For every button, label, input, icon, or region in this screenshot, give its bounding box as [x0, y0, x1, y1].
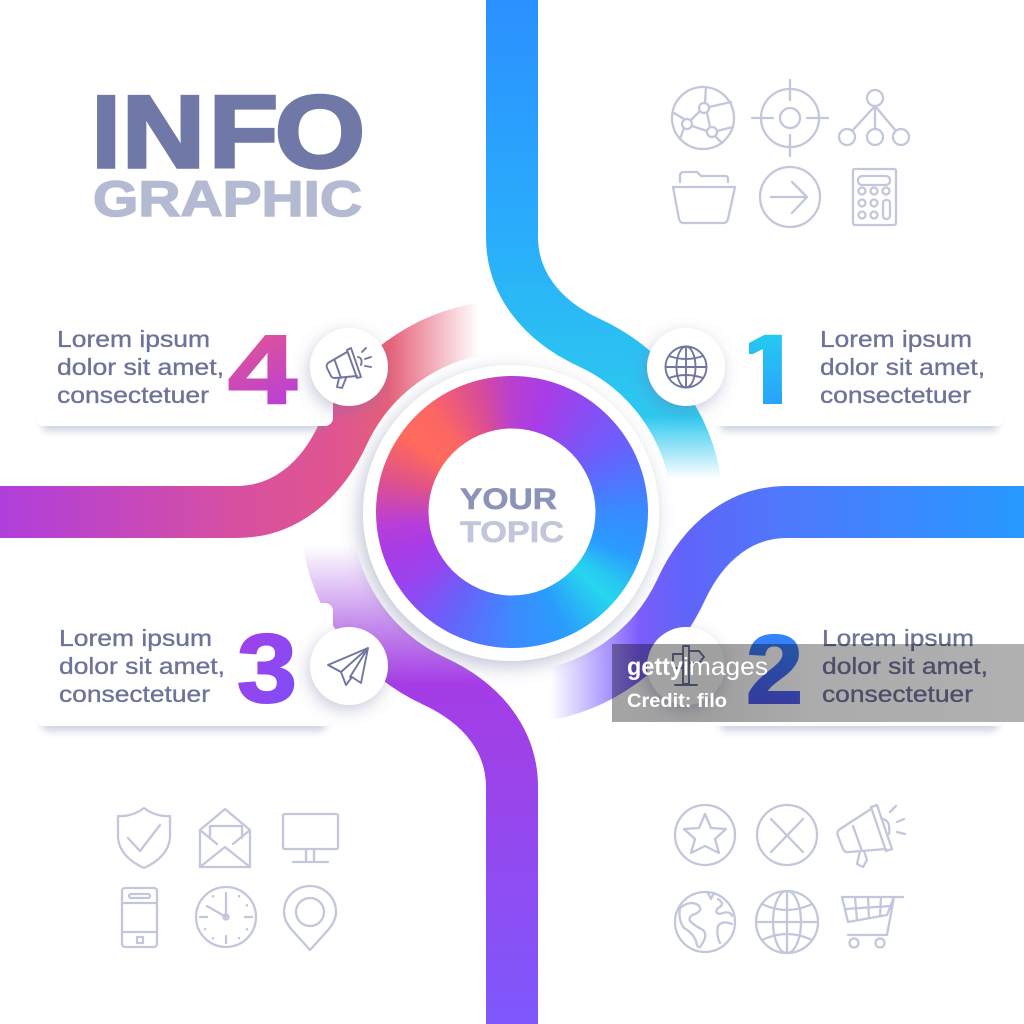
icon node 4: megaphone: [310, 328, 388, 406]
icon: map pin: [284, 886, 336, 950]
band 4: magenta ribbon from left: [0, 328, 486, 512]
band 3: purple ribbon from bottom: [328, 538, 512, 1024]
title: [92, 75, 365, 227]
card 1: [712, 303, 1004, 431]
icon: smartphone: [122, 888, 157, 947]
watermark: Credit: filo: [627, 691, 727, 712]
title: O: [275, 75, 365, 189]
text block 2: [822, 625, 988, 707]
icon: monitor: [283, 814, 338, 862]
icon: network sphere: [672, 87, 734, 149]
icon node 2: signpost: [647, 627, 725, 705]
icon: cart: [842, 897, 903, 948]
number 4: 4: [228, 315, 297, 424]
number 1: 1: [736, 315, 803, 424]
icon: clock: [196, 887, 256, 947]
icon: envelope: [200, 809, 250, 867]
text block 3: dolor sit amet,: [59, 653, 225, 679]
topic label: [460, 483, 564, 549]
centre topic ring: [363, 365, 659, 661]
icon: target: [752, 80, 828, 156]
icon node 1: globe: [647, 328, 725, 406]
band 1: blue ribbon from top: [512, 0, 696, 486]
card 3: [36, 603, 333, 731]
text block 2: consectetuer: [822, 681, 973, 707]
topic label: TOPIC: [460, 516, 564, 549]
text block 3: [59, 625, 225, 707]
text block 2: dolor sit amet,: [822, 653, 988, 679]
topic label: YOUR: [460, 483, 557, 516]
text block 1: dolor sit amet,: [820, 354, 985, 380]
icon node 3: paper plane: [310, 627, 388, 705]
icon: earth: [675, 892, 735, 952]
watermark: [612, 644, 1024, 722]
icon: globe: [756, 891, 818, 953]
title: F: [209, 75, 278, 189]
icon set: bottom right: [675, 805, 905, 953]
text block 1: [820, 326, 985, 408]
text block 2: Lorem ipsum: [822, 625, 974, 651]
icon: shield check: [118, 808, 170, 868]
number 3: 3: [237, 614, 297, 723]
icon: hierarchy: [839, 90, 909, 145]
text block 4: Lorem ipsum: [57, 326, 210, 352]
text block 4: consectetuer: [57, 382, 209, 408]
number 2: 2: [746, 615, 803, 724]
icon: close: [757, 805, 817, 865]
text block 4: [57, 326, 224, 408]
text block 4: dolor sit amet,: [57, 354, 224, 380]
text block 1: consectetuer: [820, 382, 971, 408]
card 2: [712, 603, 1004, 731]
watermark: images: [683, 653, 768, 681]
icon: folder: [673, 172, 735, 223]
icon: arrow circle: [760, 167, 820, 227]
band 2: indigo ribbon from right: [538, 512, 1024, 696]
watermark: getty: [627, 653, 683, 681]
title: GRAPHIC: [93, 171, 362, 227]
icon: calculator: [853, 169, 896, 225]
text block 1: Lorem ipsum: [820, 326, 972, 352]
text block 3: Lorem ipsum: [59, 625, 212, 651]
icon: star badge: [675, 805, 735, 865]
text block 3: consectetuer: [59, 681, 210, 707]
icon set: top right: [672, 80, 909, 227]
card 4: [36, 303, 333, 431]
icon set: bottom left: [118, 808, 338, 950]
title: N: [122, 75, 205, 189]
title: I: [92, 75, 120, 189]
icon: megaphone: [837, 805, 905, 867]
